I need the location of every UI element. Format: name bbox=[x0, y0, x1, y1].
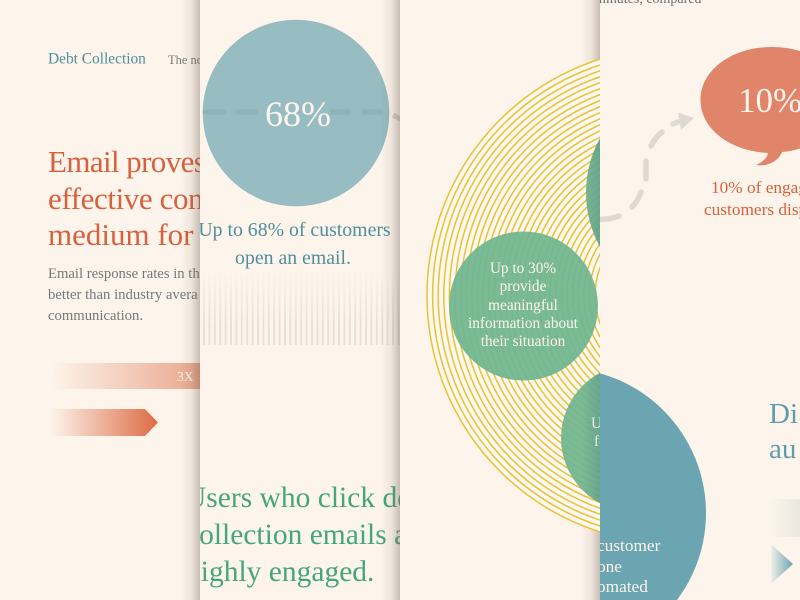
bar: 3X: 3X bbox=[177, 369, 194, 384]
heading: email proves: medium for bbox=[48, 217, 194, 252]
circle: up to 30%: meaningful bbox=[488, 297, 558, 314]
panel: 68% opens bbox=[200, 20, 400, 588]
heading: users who click: Users who click de bbox=[185, 482, 410, 514]
chart: fading vertical lines bbox=[203, 291, 400, 345]
circle: up to 30% bbox=[449, 232, 598, 380]
text: open an email: open an email. bbox=[235, 247, 351, 269]
circle: up to 30%: information about bbox=[468, 315, 579, 332]
circle: teal customer: customer bbox=[597, 536, 661, 555]
arrow: dashed curve bbox=[600, 112, 694, 220]
circle: up to 30%: Up to 30% bbox=[490, 260, 556, 277]
panel shadow: second sheet bbox=[180, 0, 200, 600]
panel shadow: fourth sheet bbox=[586, 0, 600, 600]
circle: up to 30%: their situation bbox=[481, 333, 566, 350]
circle: bottom green: for bbox=[594, 433, 612, 450]
heading: email proves: effective com bbox=[48, 181, 212, 216]
bar: 3X bbox=[50, 363, 200, 389]
panel: meaningful responses bbox=[426, 0, 600, 600]
heading: users who click: collection emails a bbox=[186, 519, 407, 551]
circle: teal customer bbox=[600, 373, 706, 600]
bar: faded grey bbox=[782, 499, 800, 537]
text: header intro: The no bbox=[168, 53, 203, 67]
text: response rates: Email response rates in the bbox=[48, 266, 207, 282]
arrow: dashed start bbox=[393, 115, 404, 121]
text: open an email: Up to 68% of customers bbox=[198, 219, 391, 241]
circle: 68% bbox=[203, 20, 389, 206]
circle: teal customer: omated bbox=[597, 577, 648, 596]
bar: arrow bbox=[50, 409, 158, 436]
circle: top green bbox=[586, 138, 600, 247]
text: response rates: better than industry avera bbox=[48, 287, 198, 303]
heading: dialogue automated: au bbox=[769, 433, 796, 465]
panel: automated bbox=[600, 0, 800, 600]
heading: dialogue automated: Di bbox=[769, 398, 798, 430]
heading: users who click: highly engaged. bbox=[186, 556, 374, 588]
chart: concentric yellow rings bbox=[426, 58, 600, 533]
circle: bottom green bbox=[561, 372, 600, 504]
text: response rates: communication. bbox=[48, 308, 143, 324]
circle: 68%: 68% bbox=[265, 94, 331, 134]
heading: email proves: Email proves bbox=[48, 144, 205, 179]
speech bubble: 10% bbox=[700, 47, 800, 165]
panel: email response bbox=[48, 50, 212, 436]
panel shadow: third sheet bbox=[380, 0, 400, 600]
circle: bottom green: Up bbox=[591, 415, 610, 432]
heading: debt collection: Debt Collection bbox=[48, 50, 146, 68]
circle: up to 30%: provide bbox=[500, 278, 547, 295]
arrow: teal triangle bbox=[771, 544, 793, 584]
circle: teal customer: one bbox=[597, 557, 622, 576]
